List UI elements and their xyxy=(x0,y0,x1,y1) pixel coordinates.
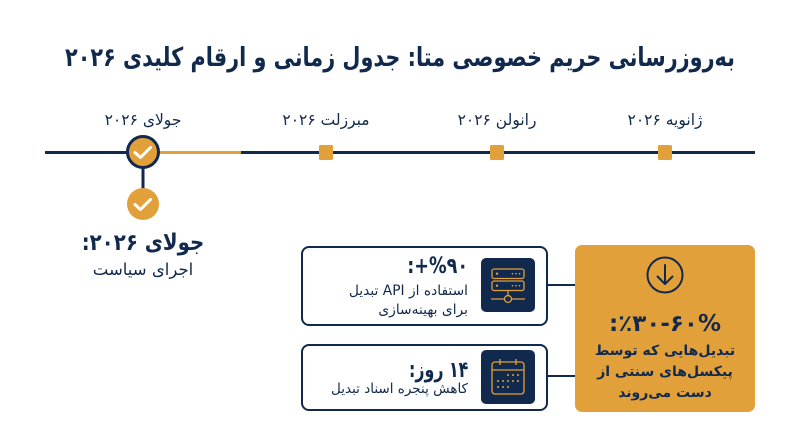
timeline graphic xyxy=(45,135,755,220)
stat text xyxy=(349,283,468,318)
callout text: اجرای سیاست xyxy=(93,260,193,279)
stat text: استفاده از API تبدیل xyxy=(349,283,468,299)
stat text: کاهش پنجره اسناد تبدیل xyxy=(331,381,468,397)
stat text: پیکسل‌های سنتی از xyxy=(597,364,733,380)
label: second milestone: رانولن ۲۰۲۶ xyxy=(458,111,536,129)
card: API usage xyxy=(301,246,548,326)
stat text xyxy=(595,343,735,401)
title: به‌روزرسانی حریم خصوصی متا: جدول زمانی و ارقام کلیدی ۲۰۲۶ xyxy=(65,43,735,73)
card: 14 days xyxy=(301,344,548,411)
icon: server xyxy=(481,258,535,312)
panel: conversion loss xyxy=(575,245,755,412)
icon: down arrow xyxy=(646,256,684,294)
stat text: دست می‌روند xyxy=(618,385,712,401)
label: third milestone: مبرزلت ۲۰۲۶ xyxy=(282,111,370,129)
stat text: برای بهینه‌سازی xyxy=(378,302,468,318)
callout heading: جولای ۲۰۲۶: xyxy=(82,230,204,256)
stat: :+%۹۰ xyxy=(407,254,468,279)
label: January: ژانویه ۲۰۲۶ xyxy=(628,111,702,129)
stat: ۱۴ روز: xyxy=(409,358,468,383)
milestone callout xyxy=(82,230,204,279)
stat text: تبدیل‌هایی که توسط xyxy=(595,343,735,359)
label: July: جولای ۲۰۲۶ xyxy=(105,111,181,129)
icon: calendar xyxy=(481,350,535,404)
stat: :٪۳۰-۶۰% xyxy=(609,311,721,337)
timeline xyxy=(45,111,755,220)
